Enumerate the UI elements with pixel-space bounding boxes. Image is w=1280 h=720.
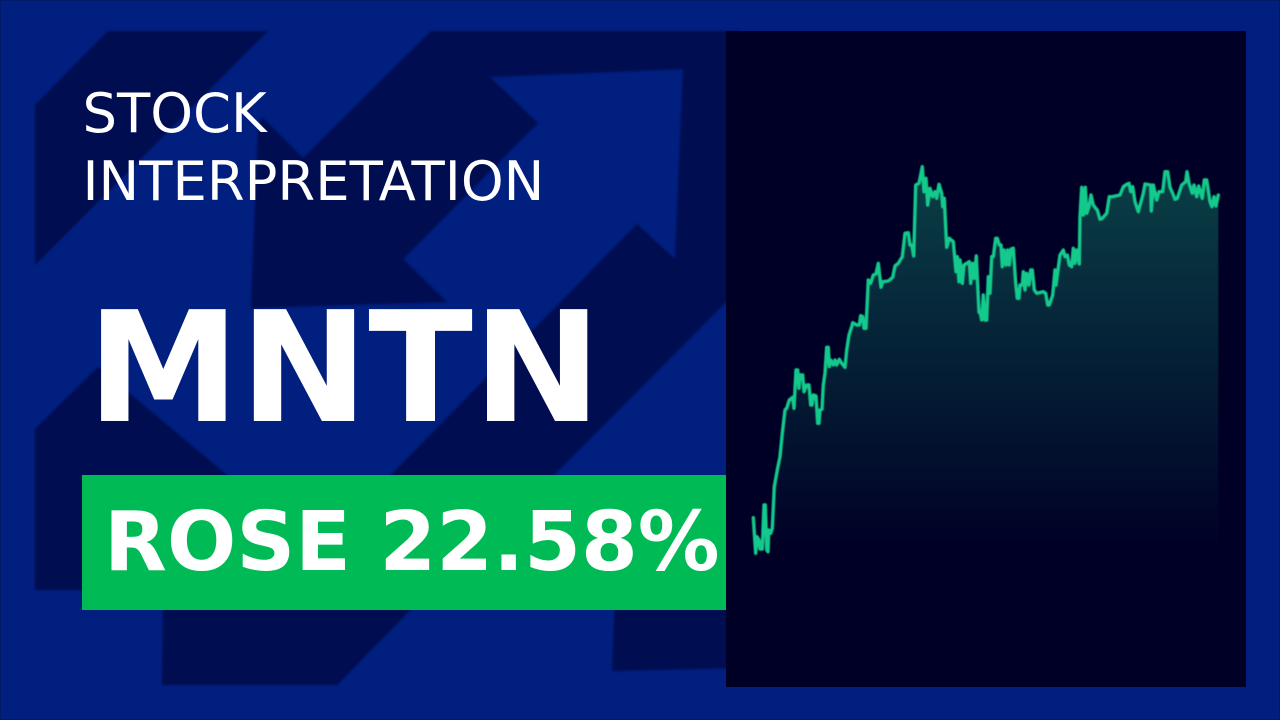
callout: percentage change: ROSE 22.58% [104,495,720,590]
panel: chart background [726,31,1246,687]
line chart: stock price [753,167,1218,553]
heading: stock interpretation [82,82,544,213]
heading: stock interpretation: INTERPRETATION [82,150,544,213]
heading: stock interpretation: STOCK [82,82,268,145]
background arrow pattern [35,31,740,685]
callout: percentage change [82,475,726,610]
ticker symbol: MNTN [87,280,601,458]
price line [753,167,1218,553]
chart area fill [753,167,1218,553]
